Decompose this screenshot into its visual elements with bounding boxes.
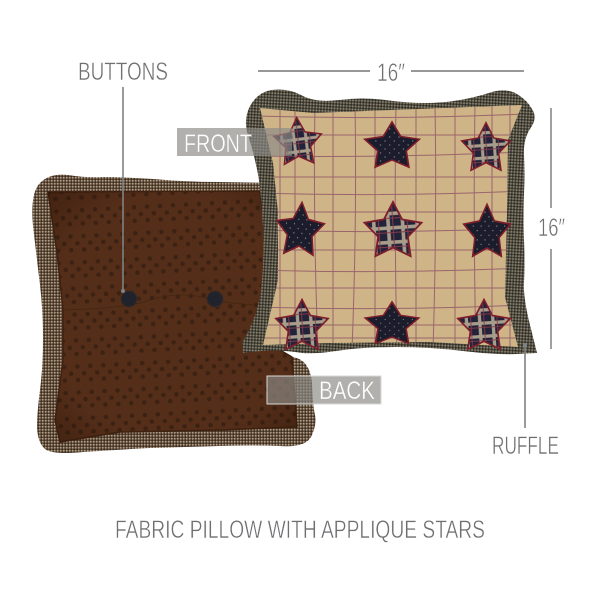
front pillow <box>242 90 537 354</box>
star top left <box>273 116 323 165</box>
back pillow <box>32 175 316 453</box>
dimension: height 16 inches: 16″ <box>538 214 565 242</box>
label: back <box>267 376 381 405</box>
label: back: BACK <box>319 377 375 405</box>
button closure seam <box>65 295 262 310</box>
star top right <box>462 123 510 170</box>
front ruffle <box>242 90 537 354</box>
right button <box>207 291 223 307</box>
front fabric panel <box>260 105 522 347</box>
label: front: FRONT <box>184 130 252 158</box>
label: buttons: BUTTONS <box>78 58 168 86</box>
label: buttons <box>78 58 168 293</box>
label: ruffle <box>492 343 559 460</box>
plaid grid lines <box>255 105 525 350</box>
dimension: width 16 inches: 16″ <box>377 59 405 87</box>
star middle right <box>464 204 510 256</box>
back fabric panel <box>48 191 297 442</box>
label: front <box>177 128 292 158</box>
star top middle <box>365 122 419 167</box>
label: ruffle: RUFFLE <box>492 432 559 460</box>
star bottom middle <box>365 302 419 344</box>
caption: FABRIC PILLOW WITH APPLIQUE STARS <box>115 516 485 544</box>
star middle left <box>275 201 326 256</box>
back shading <box>48 191 297 442</box>
left button <box>121 291 137 307</box>
back ruffle <box>32 175 316 453</box>
star bottom left <box>276 300 328 349</box>
star centre <box>364 202 422 256</box>
star bottom right <box>458 300 510 349</box>
